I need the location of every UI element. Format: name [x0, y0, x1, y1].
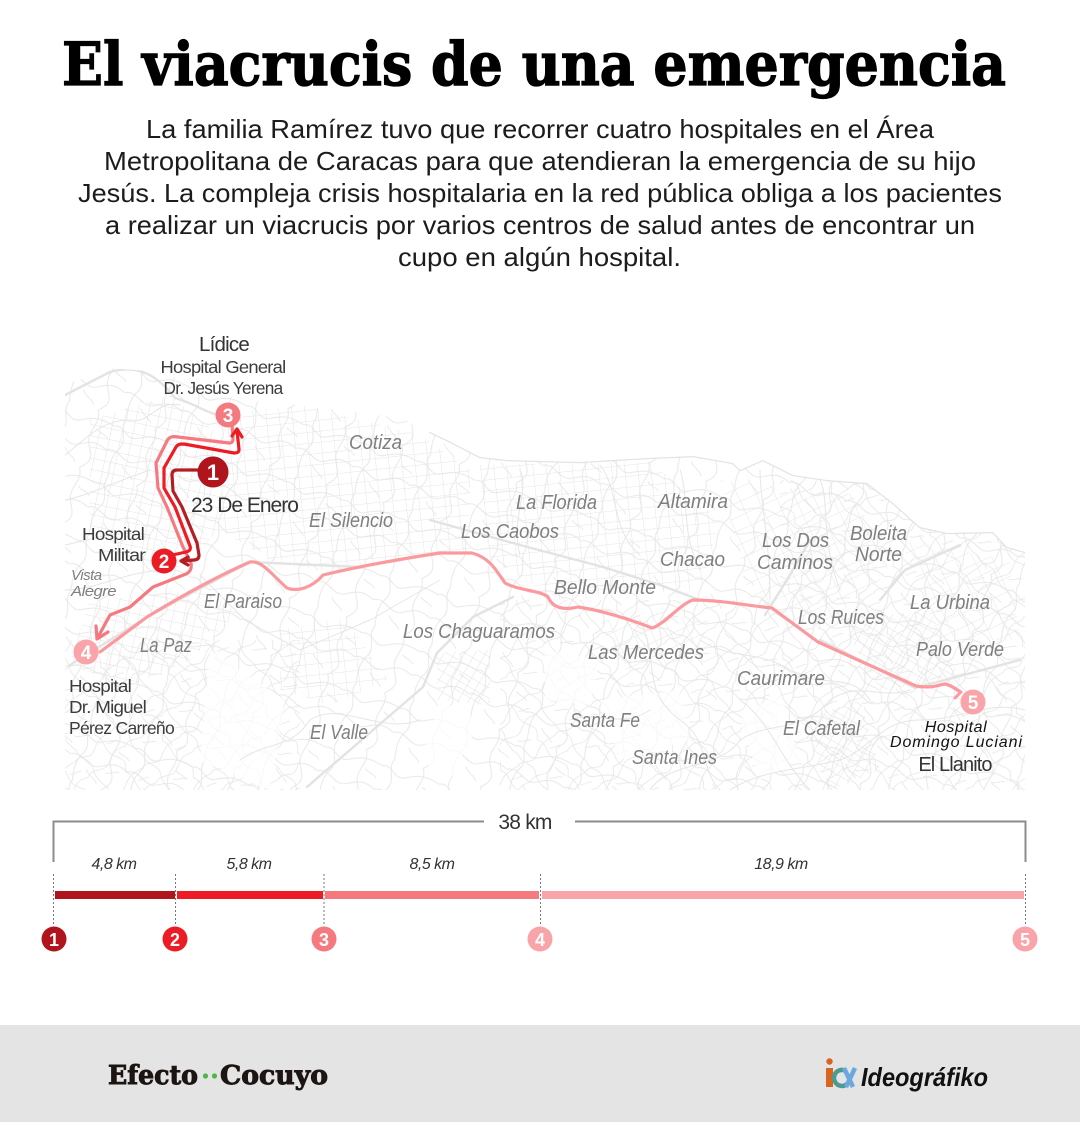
marker 4 and label Hospital Pérez Carreño: Hospital: [69, 676, 131, 696]
scale markers: 1: [49, 930, 59, 950]
place labels: Los Dos: [762, 530, 829, 552]
place labels: Alegre: [70, 583, 116, 600]
segment labels: 5,8 km: [226, 856, 272, 873]
place labels: Santa Ines: [632, 747, 717, 769]
place labels: El Cafetal: [783, 718, 860, 740]
intro text: Jesús. La compleja crisis hospitalaria en la red pública obliga a los pacientes: [78, 178, 1002, 208]
marker 4 and label Hospital Pérez Carreño: [69, 640, 174, 738]
marker 3 and label Lídice: Lídice: [199, 333, 249, 356]
street network: [65, 362, 1025, 791]
marker 3 and label Lídice: Hospital General: [160, 357, 286, 377]
place labels: La Paz: [140, 635, 192, 657]
place labels: Santa Fe: [570, 710, 640, 732]
place labels: Norte: [855, 544, 902, 566]
marker 2 and label Hospital Militar: [82, 524, 176, 574]
marker 3 and label Lídice: [160, 333, 286, 428]
marker 4 and label Hospital Pérez Carreño: 4: [81, 643, 92, 664]
segment labels: 4,8 km: [91, 856, 137, 873]
scale markers: 5: [1020, 930, 1030, 950]
scale markers: 4: [535, 930, 545, 950]
place labels: Cotiza: [349, 432, 402, 454]
marker 2 and label Hospital Militar: Militar: [98, 545, 146, 565]
place labels: Las Mercedes: [588, 642, 704, 664]
marker 5 and label Hospital Domingo Luciani: 5: [968, 693, 979, 714]
footer band: [0, 1025, 1080, 1122]
place labels: [70, 432, 1004, 769]
logo: Efecto Cocuyo: Cocuyo: [220, 1061, 328, 1091]
logo: Ideográfiko: [826, 1058, 988, 1092]
place labels: Caurimare: [737, 668, 825, 690]
place labels: Chacao: [660, 549, 725, 571]
logo: Ideográfiko: Ideográfiko: [861, 1062, 988, 1092]
marker 4 and label Hospital Pérez Carreño: Dr. Miguel: [69, 697, 146, 717]
total distance bracket: [54, 811, 1026, 862]
place labels: Los Chaguaramos: [403, 621, 555, 643]
marker 5 and label Hospital Domingo Luciani: Hospital: [925, 719, 987, 736]
marker 1 and label 23 De Enero: 23 De Enero: [191, 494, 298, 517]
marker 2 and label Hospital Militar: 2: [159, 552, 169, 573]
scale markers: 2: [170, 930, 180, 950]
intro text: a realizar un viacrucis por varios centros de salud antes de encontrar un: [105, 210, 975, 240]
place labels: Los Ruices: [798, 607, 884, 629]
marker 2 and label Hospital Militar: Hospital: [82, 524, 144, 544]
place labels: Vista: [71, 567, 102, 584]
place labels: El Silencio: [309, 510, 393, 532]
segment bars: [55, 891, 1024, 899]
place labels: La Florida: [516, 492, 597, 514]
intro text: [78, 114, 1002, 272]
marker 4 and label Hospital Pérez Carreño: Pérez Carreño: [69, 718, 174, 738]
distance scale: [42, 811, 1038, 952]
scale markers: [42, 926, 1038, 952]
place labels: Caminos: [757, 552, 833, 574]
route 4 to 5: [100, 553, 961, 698]
logo: Efecto Cocuyo: Efecto: [108, 1061, 198, 1091]
marker 1 and label 23 De Enero: 1: [207, 460, 219, 485]
logo: Efecto Cocuyo: [108, 1061, 328, 1091]
marker 1 and label 23 De Enero: [191, 456, 298, 517]
marker 5 and label Hospital Domingo Luciani: [890, 690, 1022, 776]
marker 5 and label Hospital Domingo Luciani: Domingo Luciani: [890, 734, 1022, 751]
map of Caracas: [65, 333, 1025, 791]
place labels: Boleita: [850, 523, 907, 545]
scale markers: 3: [319, 930, 329, 950]
dotted ticks: [54, 874, 1026, 926]
intro text: La familia Ramírez tuvo que recorrer cuatro hospitales en el Área: [146, 114, 935, 144]
route 1 to 2: [172, 470, 200, 565]
place labels: La Urbina: [910, 592, 990, 614]
place labels: El Valle: [310, 722, 368, 744]
place labels: El Paraiso: [204, 591, 282, 613]
place labels: Bello Monte: [554, 577, 656, 599]
total distance bracket: 38 km: [498, 811, 552, 834]
intro text: Metropolitana de Caracas para que atendieran la emergencia de su hijo: [104, 146, 976, 176]
segment labels: 18,9 km: [754, 856, 808, 873]
route 3 to 4: [96, 425, 233, 639]
route 2 to 3: [164, 429, 242, 556]
segment labels: 8,5 km: [409, 856, 455, 873]
intro text: cupo en algún hospital.: [398, 242, 681, 272]
segment labels: [91, 856, 808, 873]
place labels: Los Caobos: [461, 521, 559, 543]
marker 3 and label Lídice: 3: [223, 406, 233, 427]
place labels: Altamira: [657, 491, 728, 513]
marker 3 and label Lídice: Dr. Jesús Yerena: [164, 378, 283, 398]
place labels: Palo Verde: [916, 639, 1004, 661]
marker 5 and label Hospital Domingo Luciani: El Llanito: [918, 754, 992, 776]
